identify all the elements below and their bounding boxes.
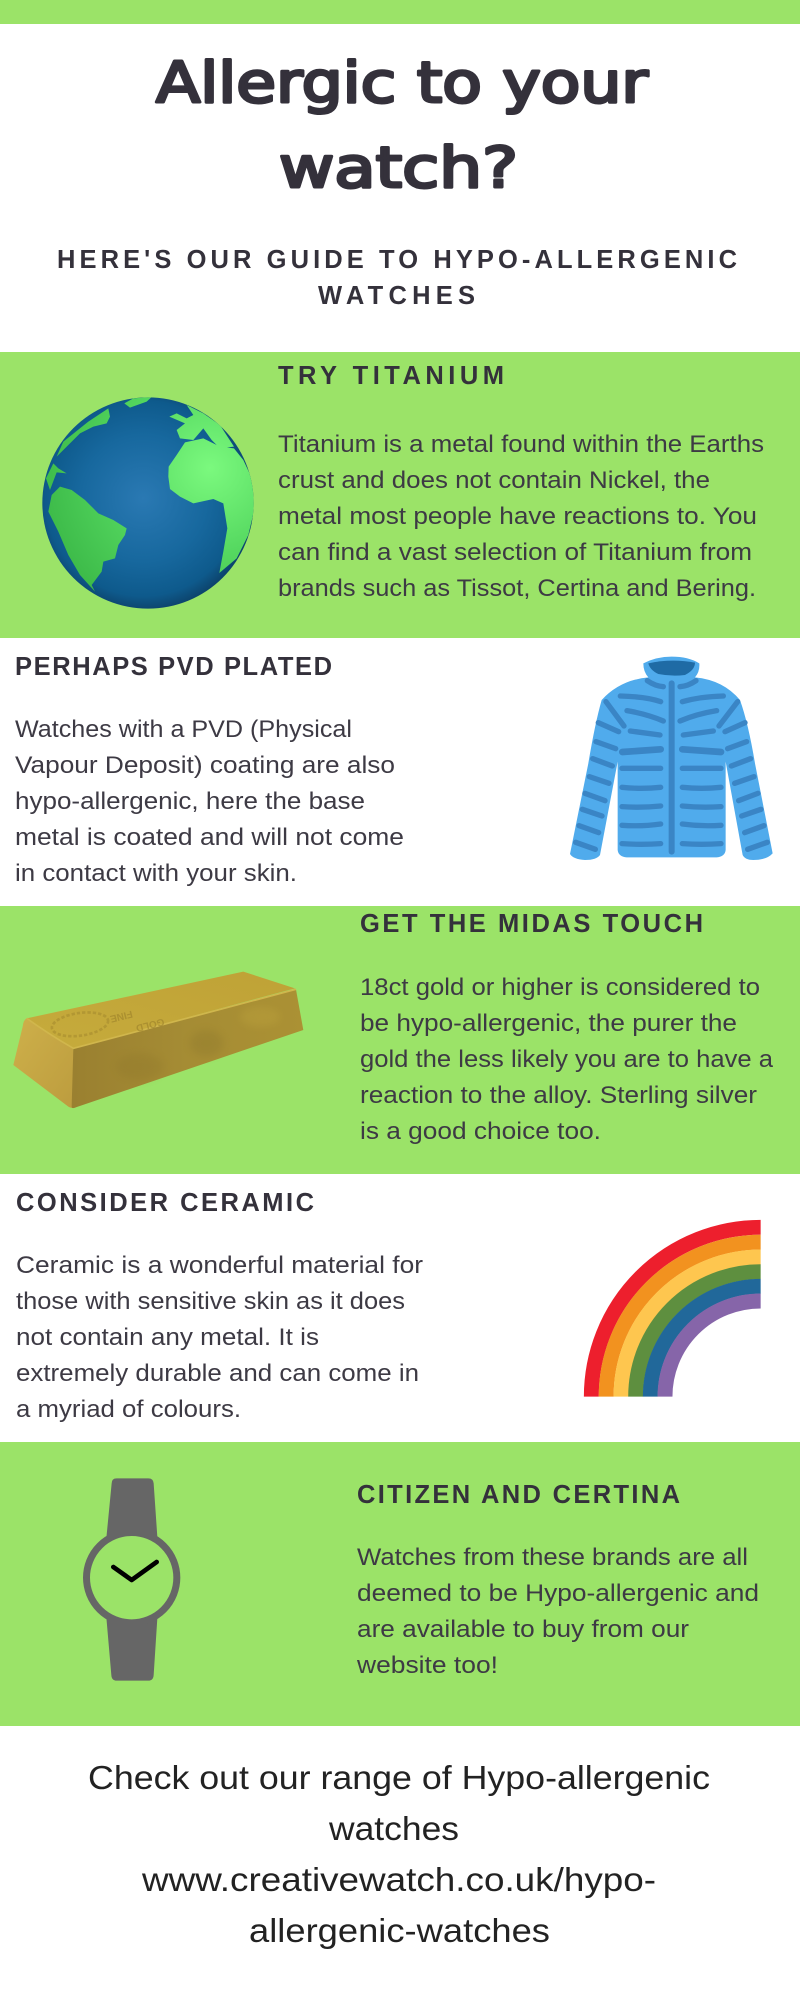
panel: consider ceramic (0, 1174, 800, 1442)
engraving: fine gold: GOLD (135, 1015, 165, 1033)
text block: ceramic: a myriad of colours. (16, 1396, 241, 1423)
heading: get the midas touch: GET THE MIDAS TOUCH (360, 910, 703, 938)
engraving: fine gold: FINE (109, 1008, 134, 1024)
icon: watch (86, 1478, 177, 1681)
text block: gold: 18ct gold or higher is considered to (360, 974, 760, 1001)
text block: titanium (278, 431, 764, 602)
engraving: fine gold (109, 1008, 165, 1033)
icon: gold bar (13, 972, 303, 1108)
text block: brands (356, 1544, 759, 1679)
icon: globe (42, 397, 255, 609)
text block: ceramic: extremely durable and can come in (16, 1360, 419, 1387)
text block: ceramic (16, 1252, 423, 1423)
subtitle: HERE'S OUR GUIDE TO HYPO-ALLERGENIC (57, 246, 737, 274)
panel: citizen and certina (0, 1442, 800, 1726)
text block: brands: Watches from these brands are all (357, 1544, 748, 1571)
footer call to action: Check out our range of Hypo-allergenic (88, 1759, 710, 1796)
text block: pvd: metal is coated and will not come (15, 824, 404, 851)
title: watch? (279, 136, 518, 201)
footer call to action: watches (328, 1810, 459, 1847)
text block: ceramic: Ceramic is a wonderful material for (16, 1252, 423, 1279)
text block: gold (360, 974, 773, 1145)
text block: titanium: can find a vast selection of Titanium from (278, 539, 752, 566)
text block: gold: reaction to the alloy. Sterling silver (360, 1082, 757, 1109)
panel: get the midas touch (0, 906, 800, 1174)
text block: pvd: Vapour Deposit) coating are also (15, 752, 395, 779)
title: Allergic to your (156, 51, 649, 116)
panel: perhaps pvd plated (0, 638, 800, 906)
footer call to action: www.creativewatch.co.uk/hypo- (141, 1861, 656, 1898)
text block: brands: deemed to be Hypo-allergenic and (357, 1580, 759, 1607)
subtitle: WATCHES (318, 282, 475, 310)
footer call to action (88, 1759, 710, 1949)
text block: pvd: in contact with your skin. (15, 860, 297, 887)
text block: ceramic: not contain any metal. It is (16, 1324, 319, 1351)
top green bar (0, 0, 800, 24)
heading: perhaps pvd plated: PERHAPS PVD PLATED (15, 653, 332, 681)
text block: titanium: brands such as Tissot, Certina and Bering. (278, 575, 756, 602)
heading: consider ceramic: CONSIDER CERAMIC (16, 1189, 314, 1217)
text block: pvd (15, 716, 404, 887)
text block: titanium: Titanium is a metal found within the Earths (278, 431, 764, 458)
text block: brands: are available to buy from our (357, 1616, 689, 1643)
text block: pvd: hypo-allergenic, here the base (15, 788, 365, 815)
panel: try titanium (0, 352, 800, 638)
title (156, 51, 649, 201)
heading: try titanium: TRY TITANIUM (278, 362, 504, 390)
text block: pvd: Watches with a PVD (Physical (15, 716, 352, 743)
text block: titanium: metal most people have reactions to. You (278, 503, 757, 530)
icon: blue jacket (570, 657, 773, 860)
footer call to action: allergenic-watches (249, 1912, 550, 1949)
icon: rainbow (591, 1227, 761, 1397)
text block: gold: gold the less likely you are to have a (360, 1046, 773, 1073)
text block: brands: website too! (356, 1652, 498, 1679)
text block: gold: be hypo-allergenic, the purer the (360, 1010, 737, 1037)
text block: ceramic: those with sensitive skin as it does (16, 1288, 405, 1315)
text block: titanium: crust and does not contain Nickel, the (278, 467, 710, 494)
heading: citizen and certina: CITIZEN AND CERTINA (357, 1481, 680, 1509)
subtitle (57, 246, 737, 310)
text block: gold: is a good choice too. (360, 1118, 601, 1145)
